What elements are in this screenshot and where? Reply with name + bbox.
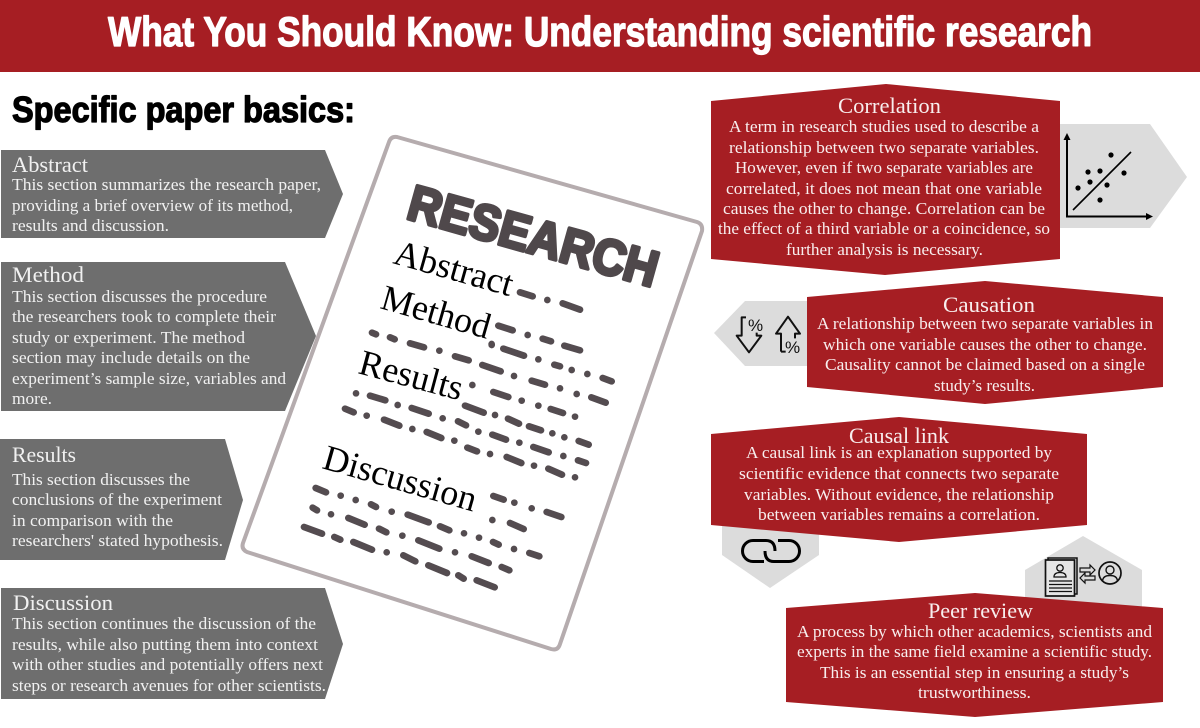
- panel: causal link: between variables remains a correlation.: [758, 505, 1040, 524]
- panel: correlation: further analysis is necessary.: [786, 240, 983, 259]
- panel: peer review: experts in the same field examine a scientific study.: [797, 642, 1152, 661]
- panel: peer review: trustworthiness.: [918, 683, 1031, 702]
- panel: discussion: Discussion: [13, 590, 113, 615]
- panel: causation: [807, 281, 1163, 404]
- panel: abstract: providing a brief overview of its method,: [12, 196, 293, 215]
- icon: percent arrows on gray arrow: %: [748, 316, 763, 335]
- panel: results: researchers' stated hypothesis.: [12, 531, 223, 550]
- panel: peer review: A process by which other academics, scientists and: [797, 622, 1152, 641]
- icon: percent arrows on gray arrow: %: [785, 338, 800, 357]
- paper label: method: Method: [377, 277, 495, 347]
- panel: causal link: A causal link is an explanation supported by: [746, 443, 1052, 462]
- paper label: abstract: Abstract: [390, 232, 518, 304]
- panel: discussion: This section continues the discussion of the: [12, 614, 316, 633]
- panel: correlation: However, even if two separate variables are: [735, 158, 1033, 177]
- panel: discussion: with other studies and potentially offers next: [12, 655, 323, 674]
- icon: scatter plot on gray arrow: [1060, 124, 1187, 228]
- panel: correlation: causes the other to change. Correlation can be: [723, 199, 1045, 218]
- panel: abstract: results and discussion.: [12, 216, 169, 235]
- panel: causal link: Causal link: [849, 423, 950, 448]
- scribbled text lines: [304, 292, 612, 587]
- panel: results: conclusions of the experiment: [12, 490, 222, 509]
- icon: peer review document and person: [1025, 536, 1142, 612]
- panel: abstract: This section summarizes the research paper,: [12, 175, 321, 194]
- panel: abstract: Abstract: [12, 152, 89, 177]
- panel: method: [1, 262, 316, 411]
- panel: causation: Causality cannot be claimed based on a single: [825, 355, 1145, 374]
- panel: correlation: Correlation: [838, 93, 941, 118]
- panel: results: in comparison with the: [12, 511, 173, 530]
- panel: peer review: [786, 593, 1163, 717]
- panel: results: Results: [12, 442, 76, 467]
- panel: discussion: [1, 588, 343, 699]
- panel: causal link: [711, 417, 1087, 542]
- panel: method: experiment’s sample size, variables and: [12, 369, 286, 388]
- panel: causation: study’s results.: [934, 376, 1035, 395]
- panel: correlation: correlated, it does not mean that one variable: [726, 179, 1042, 198]
- panel: results: [0, 439, 243, 560]
- panel: results: This section discusses the: [12, 470, 190, 489]
- panel: causation: which one variable causes the other to change.: [823, 335, 1147, 354]
- panel: method: more.: [12, 389, 52, 408]
- paper label: discussion: Discussion: [319, 437, 482, 519]
- panel: correlation: A term in research studies used to describe a: [729, 117, 1039, 136]
- paper sheet outline: [242, 137, 702, 649]
- panel: discussion: steps or research avenues for other scientists.: [12, 676, 326, 695]
- panel: causation: A relationship between two separate variables in: [817, 314, 1153, 333]
- panel: method: study or experiment. The method: [12, 328, 245, 347]
- panel: abstract: [1, 150, 343, 238]
- panel: correlation: [711, 84, 1060, 275]
- panel: peer review: This is an essential step in ensuring a study’s: [820, 663, 1129, 682]
- panel: method: This section discusses the procedure: [12, 287, 267, 306]
- paper label: results: Results: [355, 342, 468, 408]
- icon: chain link on gray pointer: [722, 520, 819, 588]
- panel: causal link: scientific evidence that connects two separate: [739, 464, 1059, 483]
- panel: method: Method: [12, 262, 84, 287]
- illustration: research paper: [242, 137, 702, 649]
- paper title: research: RESEARCH: [402, 175, 665, 298]
- panel: correlation: the effect of a third variable or a coincidence, so: [718, 219, 1050, 238]
- panel: peer review: Peer review: [928, 598, 1034, 623]
- title banner: [0, 0, 1200, 72]
- panel: causation: Causation: [943, 292, 1035, 317]
- panel: method: section may include details on the: [12, 348, 250, 367]
- panel: causal link: variables. Without evidence, the relationship: [744, 485, 1054, 504]
- panel: method: the researchers took to complete their: [12, 307, 276, 326]
- heading: specific paper basics: Specific paper basics:: [12, 89, 355, 130]
- panel: correlation: relationship between two separate variables.: [729, 138, 1039, 157]
- icon: percent arrows on gray arrow: [714, 301, 810, 366]
- panel: discussion: results, while also putting them into context: [12, 635, 318, 654]
